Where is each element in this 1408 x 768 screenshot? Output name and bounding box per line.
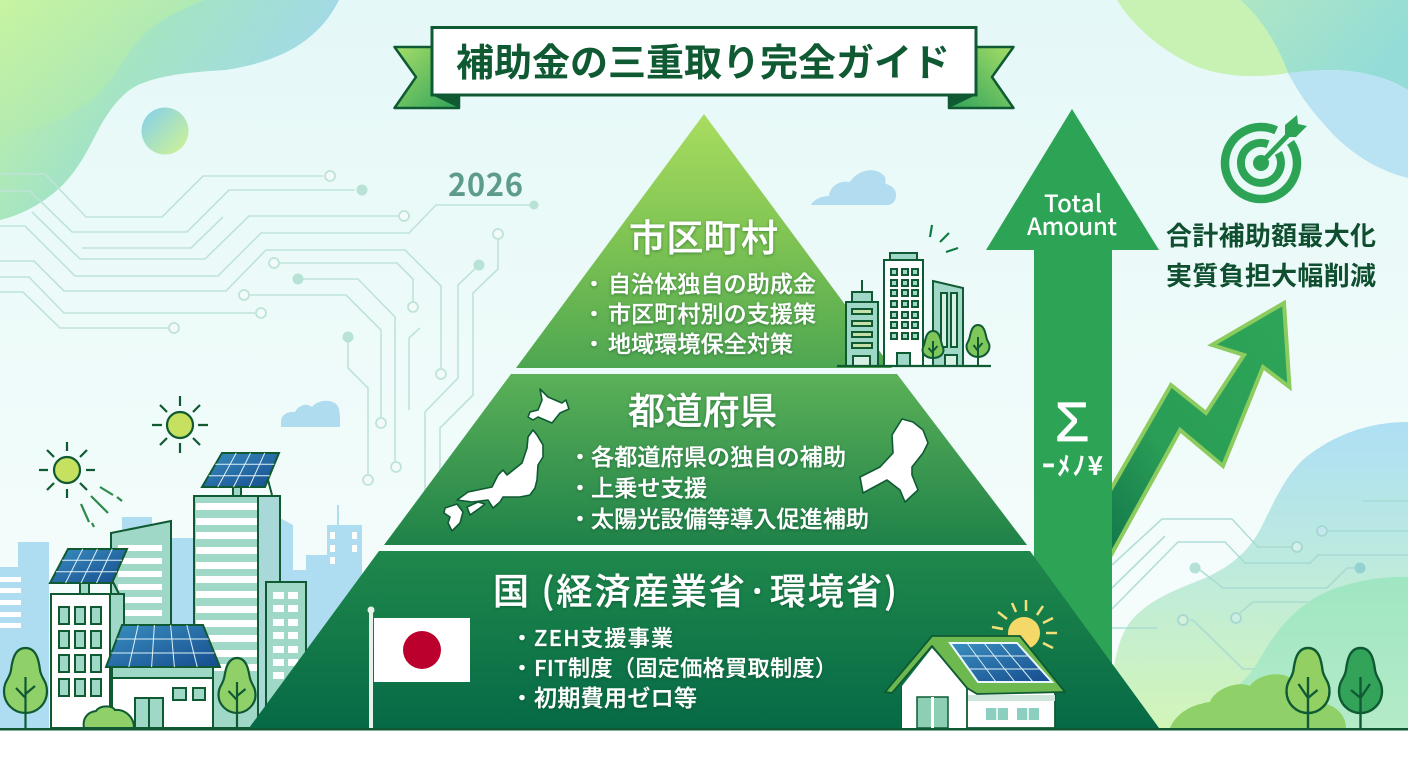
icon: house with solar [885, 600, 1065, 728]
tree: right 2 [1339, 648, 1382, 728]
bush: right [1170, 674, 1346, 728]
icon: sun 2 [152, 396, 208, 453]
map: japan [444, 389, 569, 531]
tier 2 text [569, 381, 869, 534]
icon: target [1225, 115, 1307, 199]
skyline [0, 505, 362, 728]
building: right small [266, 582, 306, 728]
building: angled green [111, 521, 171, 728]
tier 1 text: ・ [583, 267, 605, 299]
tier 1 text: 地域環境保全対策 [608, 325, 793, 359]
tier 2 text: 各都道府県の独自の補助 [591, 438, 846, 472]
cloud: top [811, 170, 896, 205]
tier 3 text: ・ [511, 621, 533, 653]
flag of japan [368, 606, 470, 728]
total amount arrow [986, 109, 1159, 728]
house with roof panels [106, 625, 220, 728]
map: prefecture [860, 419, 928, 502]
tier 2 text: 都道府県 [628, 381, 777, 435]
headline: result text [1166, 216, 1376, 293]
tier 3 text: ・ [511, 681, 533, 713]
ground line [0, 728, 1408, 730]
circuit lines: left [0, 171, 538, 500]
yen glyphs: ｰﾒﾉ¥ [1042, 446, 1103, 483]
pyramid [249, 114, 1159, 728]
tier 3 text: FIT制度（固定価格買取制度） [534, 651, 837, 683]
bush: left [84, 706, 134, 728]
tier 1 text: ・ [583, 327, 605, 359]
solar panel: building [50, 549, 127, 594]
arrow label: total amount: Total [1044, 184, 1102, 219]
building: tall striped [194, 496, 280, 728]
growth zigzag arrow [1100, 303, 1290, 575]
icon: sun 1 [39, 442, 122, 527]
tier 3 text [493, 563, 897, 713]
tree: left 2 [218, 658, 256, 728]
headline: result text: 合計補助額最大化 [1166, 216, 1376, 253]
tier 1 text: 自治体独自の助成金 [608, 265, 816, 299]
solar panel: tower [202, 453, 279, 496]
cloud: left [281, 401, 340, 427]
tier 1 text: 市区町村 [629, 208, 778, 262]
arrow label: total amount: Amount [1027, 207, 1117, 242]
tier 2 text: 上乗せ支援 [591, 469, 707, 503]
sigma symbol: Σ [1055, 390, 1089, 453]
title banner [394, 28, 1014, 108]
title text: 補助金の三重取り完全ガイド [456, 32, 950, 87]
building: white with panel [51, 594, 124, 728]
tier 1 text: ・ [583, 297, 605, 329]
tier 3 text: ZEH支援事業 [534, 621, 673, 653]
sun behind roof [992, 600, 1057, 649]
tier 2 text: ・ [569, 502, 591, 534]
blob: top left [0, 0, 339, 220]
blob: top right [1117, 0, 1408, 178]
tree: right 1 [1286, 648, 1330, 728]
year label: 2026 [448, 160, 523, 205]
tier 3 text: 初期費用ゼロ等 [534, 679, 697, 713]
tier 1 text: 市区町村別の支援策 [608, 295, 816, 329]
tier 1 [516, 114, 892, 368]
tier 3 [249, 551, 1159, 728]
icon: city buildings [837, 225, 991, 366]
decorative circle [142, 108, 188, 154]
tier 3 text: 国 (経済産業省·環境省) [493, 563, 897, 615]
tier 1 text [583, 208, 816, 359]
headline: result text: 実質負担大幅削減 [1166, 256, 1376, 293]
tree: left 1 [4, 648, 47, 728]
tier 2 text: 太陽光設備等導入促進補助 [591, 500, 869, 534]
tier 2 text: ・ [569, 440, 591, 472]
tier 2 text: ・ [569, 471, 591, 503]
blob: bottom right [1108, 422, 1408, 728]
tier 3 text: ・ [511, 651, 533, 683]
tier 2 [384, 374, 1027, 545]
arrow label: total amount [1027, 184, 1117, 242]
circuit lines: right [1112, 501, 1408, 669]
